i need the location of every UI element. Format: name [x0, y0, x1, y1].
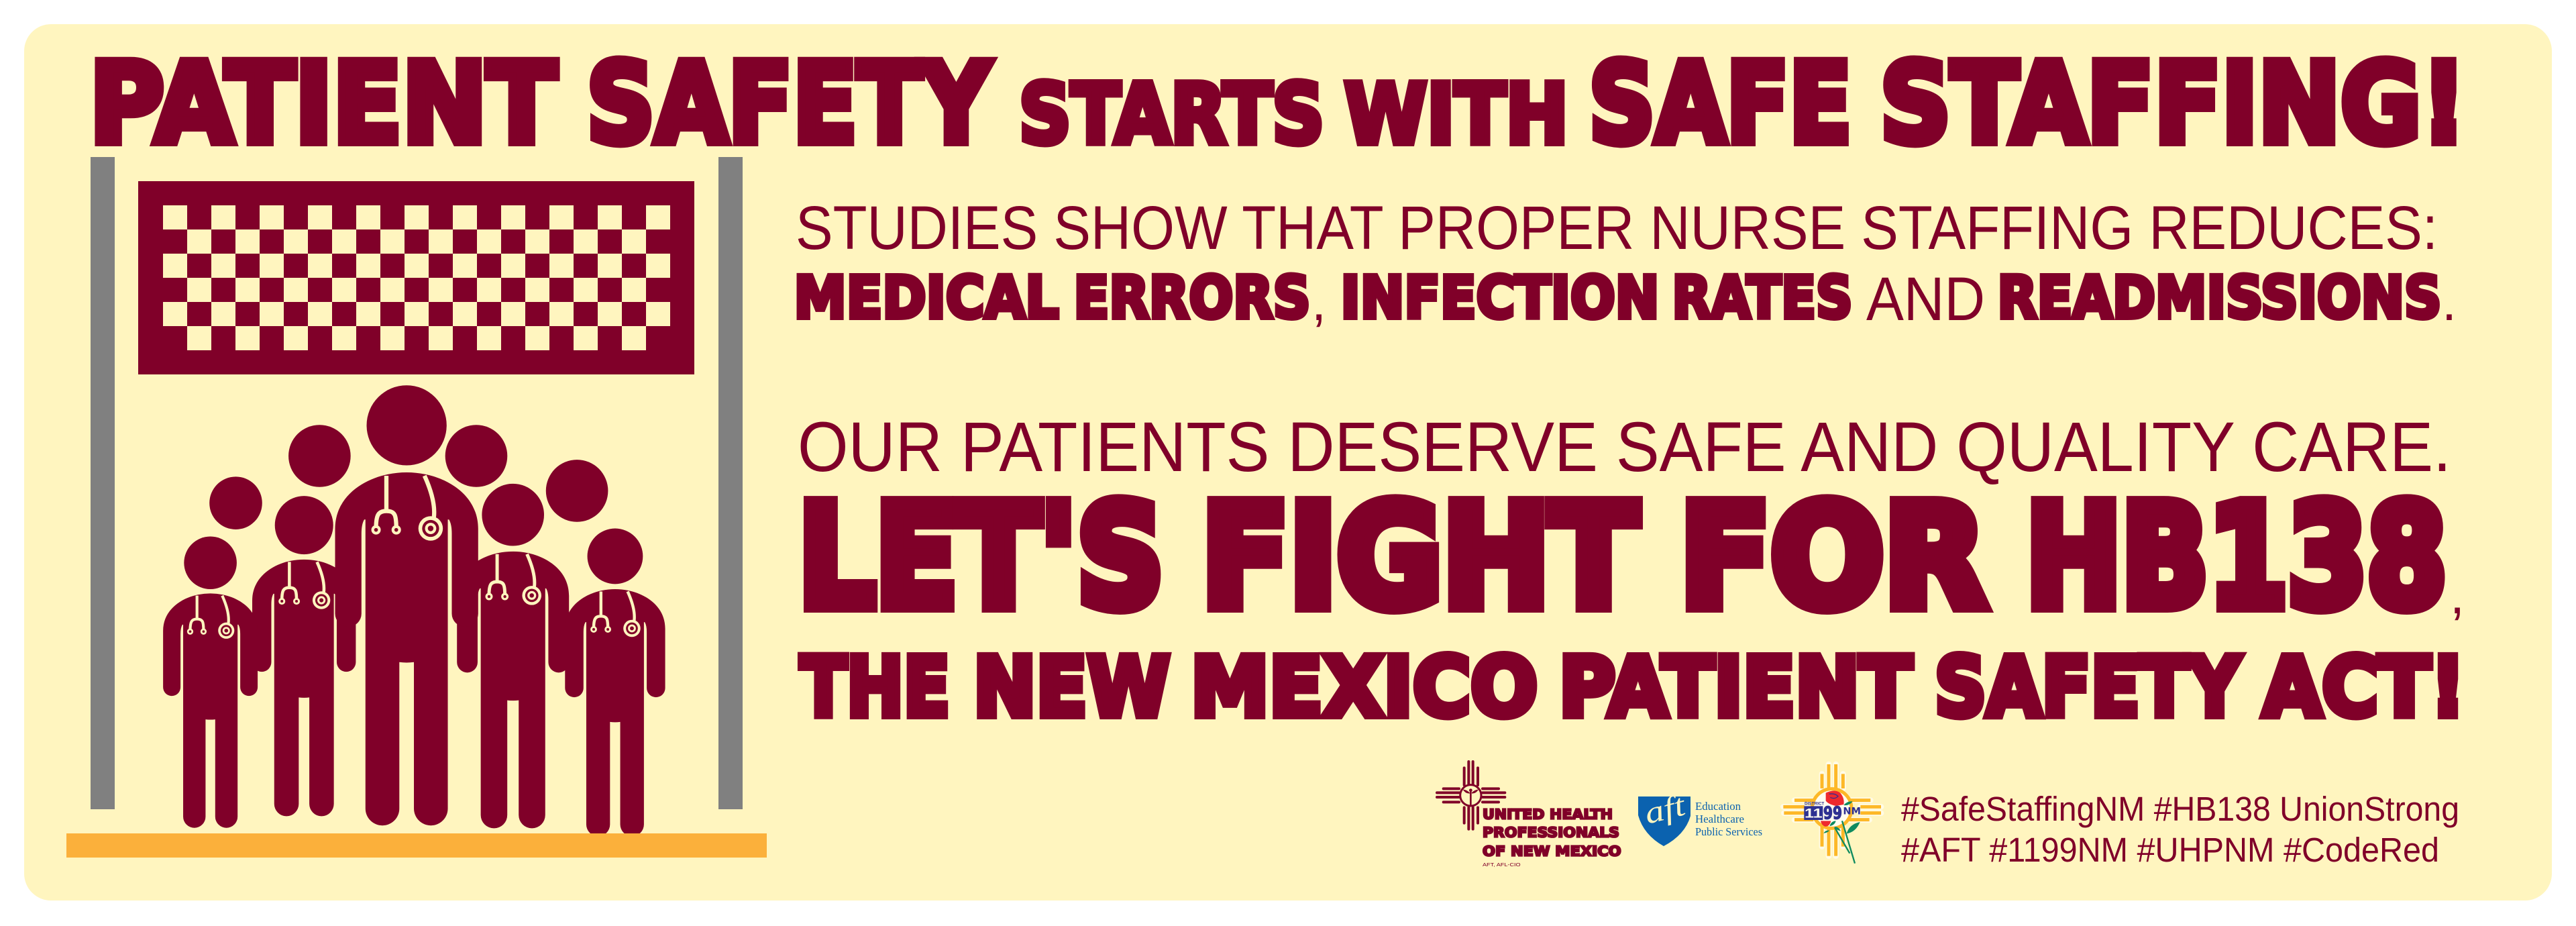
text: medical errors, infection rates and readmissions: ,: [1311, 272, 1326, 331]
text: medical errors, infection rates and readmissions: READMISSIONS: [1998, 264, 2442, 331]
headline: the new mexico patient safety act: SAFETY: [1935, 640, 2241, 735]
local number badge: NM: [1843, 806, 1861, 817]
nurse five: [565, 529, 665, 836]
nurse four: [457, 484, 569, 828]
logo: AFT shield: Public Services: [1695, 825, 1762, 838]
right grey column: [718, 157, 743, 809]
text: medical errors, infection rates and readmissions: AND: [1866, 265, 1985, 333]
central nurse: [335, 385, 478, 825]
title: WITH: [1344, 67, 1568, 163]
title: SAFE: [1589, 39, 1851, 168]
headline: let's fight for HB138: FIGHT: [1201, 474, 1638, 639]
headline: the new mexico patient safety act: THE: [800, 640, 950, 735]
logo: AFT shield: aft: [1641, 787, 1689, 831]
local number badge: DISTRICT: [1805, 802, 1824, 807]
illustration: hospital scene: [66, 157, 767, 858]
headline: let's fight for HB138: [798, 474, 2465, 639]
hashtags: [1901, 790, 2459, 869]
logo: AFT shield: Healthcare: [1695, 813, 1744, 825]
text: medical errors, infection rates and readmissions: ERRORS: [1073, 264, 1311, 331]
left grey column: [91, 157, 115, 809]
nurse one: [163, 536, 258, 828]
logo: AFT shield: [1638, 787, 1762, 846]
headline: let's fight for HB138: LET'S: [798, 474, 1164, 639]
icon: zia halo: [1783, 764, 1881, 856]
logo: United Health Professionals of New Mexico: OF NEW MEXICO: [1483, 843, 1621, 859]
text: medical errors, infection rates and readmissions: [794, 264, 2457, 333]
title: STARTS: [1019, 67, 1324, 163]
headline: let's fight for HB138: HB138: [2026, 474, 2447, 639]
text: medical errors, infection rates and readmissions: MEDICAL: [794, 264, 1059, 331]
text: studies show: STUDIES SHOW THAT PROPER NURSE STAFFING REDUCES:: [796, 194, 2438, 262]
local number badge: [1804, 802, 1861, 824]
headline: the new mexico patient safety act: PATIENT: [1559, 640, 1912, 735]
logo: District 1199NM: [1783, 764, 1881, 864]
title: PATIENT: [90, 39, 557, 168]
title: STAFFING!: [1880, 39, 2466, 168]
logo: United Health Professionals of New Mexico: [1437, 762, 1621, 868]
headline: let's fight for HB138: FOR: [1680, 474, 1986, 639]
text: medical errors, infection rates and readmissions: RATES: [1672, 264, 1853, 331]
logo: AFT shield: Education: [1695, 800, 1741, 813]
headline: let's fight for HB138: ,: [2450, 565, 2465, 625]
title: SAFETY: [586, 39, 992, 168]
back heads: [209, 425, 608, 529]
text: our patients deserve: OUR PATIENTS DESERVE SAFE AND QUALITY CARE.: [798, 408, 2451, 486]
orange floor bar: [66, 833, 767, 858]
group of nurses: [163, 385, 665, 836]
local number badge: 99: [1823, 804, 1842, 824]
logo: United Health Professionals of New Mexico: AFT, AFL-CIO: [1483, 862, 1521, 868]
icon: rose: [1821, 790, 1860, 864]
headline: the new mexico patient safety act: [800, 640, 2465, 735]
nurse two: [252, 496, 356, 816]
headline: the new mexico patient safety act: MEXICO: [1191, 640, 1538, 735]
checkered banner: [138, 181, 694, 374]
headline: the new mexico patient safety act: NEW: [973, 640, 1170, 735]
text: medical errors, infection rates and readmissions: .: [2442, 272, 2457, 331]
hashtags: #SafeStaffingNM #HB138 UnionStrong: [1901, 790, 2459, 828]
logo: United Health Professionals of New Mexico: PROFESSIONALS: [1483, 825, 1619, 841]
icon: zia rays: [1783, 764, 1881, 856]
title: [90, 39, 2466, 168]
text: medical errors, infection rates and readmissions: INFECTION: [1340, 264, 1660, 331]
icon: zia sun: [1437, 762, 1505, 829]
hashtags: #AFT #1199NM #UHPNM #CodeRed: [1901, 831, 2439, 869]
icon: shield: [1638, 796, 1690, 846]
local number badge: 11: [1805, 807, 1823, 821]
headline: the new mexico patient safety act: ACT!: [2263, 640, 2465, 735]
logo: United Health Professionals of New Mexico: UNITED HEALTH: [1483, 806, 1613, 822]
